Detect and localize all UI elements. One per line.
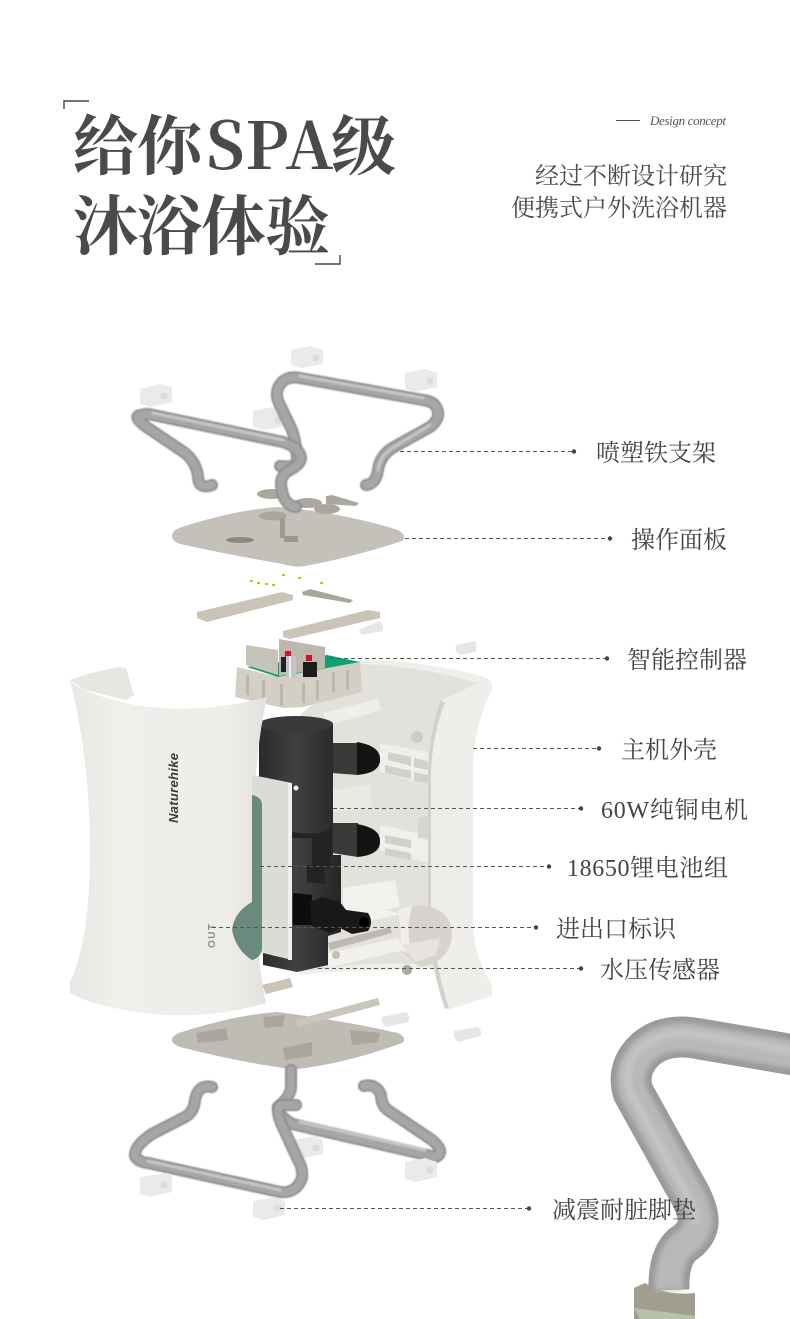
title: 沐浴体验 (73, 174, 330, 268)
tan pin (262, 978, 293, 994)
label: smart controller: 智能控制器 (627, 647, 747, 674)
top front bracket (137, 413, 301, 507)
big tube detail (628, 1033, 790, 1319)
top rubber feet (140, 346, 437, 430)
shaft (328, 927, 392, 950)
battery pack (232, 775, 298, 960)
shell flank edge (428, 700, 449, 1009)
LED dots (250, 574, 323, 586)
label: 60W motor: 60W纯铜电机 (601, 797, 748, 824)
upper rib block (380, 743, 428, 785)
title: 给你SPA级 (73, 94, 396, 188)
bottom rail (295, 998, 380, 1027)
label: control panel (405, 527, 727, 554)
shell body (300, 660, 492, 1010)
label: water pressure sensor: 水压传感器 (600, 957, 720, 984)
tube collar (634, 1283, 695, 1319)
inner blocks (333, 784, 372, 812)
label: 60W motor (333, 797, 748, 824)
label: main shell (473, 737, 717, 764)
shell interior (300, 664, 478, 972)
label: control panel: 操作面板 (631, 527, 727, 554)
subtitle: 便携式户外洗浴机器 (511, 195, 727, 222)
label: main shell: 主机外壳 (621, 737, 717, 764)
label: in/out mark (212, 916, 677, 943)
label: 18650 battery: 18650锂电池组 (567, 855, 728, 882)
label: smart controller (330, 647, 747, 674)
subtitle: 经过不断设计研究 (535, 163, 727, 190)
label: sprayed iron bracket: 喷塑铁支架 (596, 440, 716, 467)
top button parts (257, 489, 359, 514)
top back bracket (277, 376, 438, 485)
label: water pressure sensor (318, 957, 720, 984)
water outlet port (397, 905, 452, 967)
switch rails (197, 589, 380, 639)
callout labels (212, 440, 748, 1224)
front rubber feet (140, 1173, 285, 1220)
right shell (300, 660, 492, 1010)
bottom rubber feet (293, 1136, 437, 1182)
motor (259, 716, 380, 972)
operation panel (172, 507, 404, 567)
bottom panel (172, 998, 404, 1069)
bottom front bracket (135, 1087, 302, 1192)
design concept tag (616, 113, 726, 128)
subtitle (511, 163, 727, 222)
label: in/out mark: 进出口标识 (556, 916, 677, 943)
label: anti-vibration foot pad (280, 1197, 696, 1224)
label: 18650 battery (260, 855, 728, 882)
design concept tag: Design concept (649, 113, 726, 128)
left shell (70, 667, 267, 1015)
motor mount lugs (332, 742, 380, 857)
exploded product view (70, 346, 492, 1220)
water connector (293, 893, 371, 934)
brand logo: Naturehike (166, 753, 181, 823)
label: anti-vibration foot pad: 减震耐脏脚垫 (552, 1197, 696, 1224)
white pins (359, 621, 481, 1042)
OUT mark: OUT (207, 924, 218, 948)
top rail (323, 699, 381, 726)
bottom back bracket (278, 1070, 440, 1157)
title (64, 94, 396, 268)
lower rib block (380, 816, 428, 863)
intelligent controller (235, 639, 362, 708)
label: sprayed iron bracket (400, 440, 716, 467)
